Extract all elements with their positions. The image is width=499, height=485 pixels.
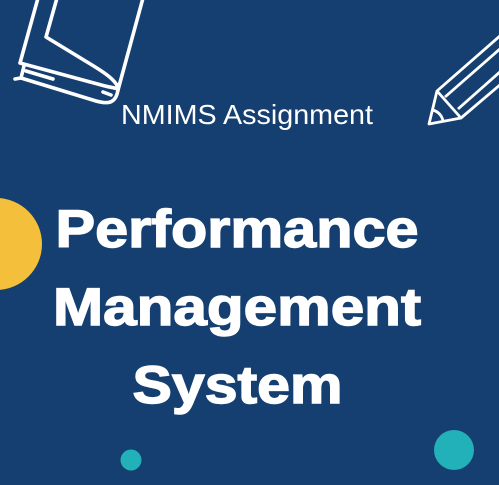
icon: pencil <box>429 35 499 124</box>
title <box>53 200 421 415</box>
title line 3: System <box>132 356 342 415</box>
title line 2: Management <box>53 278 421 337</box>
decorative small teal circle <box>120 450 142 470</box>
decorative yellow circle <box>0 198 42 290</box>
icon: book <box>15 0 143 103</box>
subtitle: NMIMS Assignment <box>121 99 373 130</box>
decorative large teal circle <box>434 430 474 470</box>
title line 1: Performance <box>56 200 418 259</box>
